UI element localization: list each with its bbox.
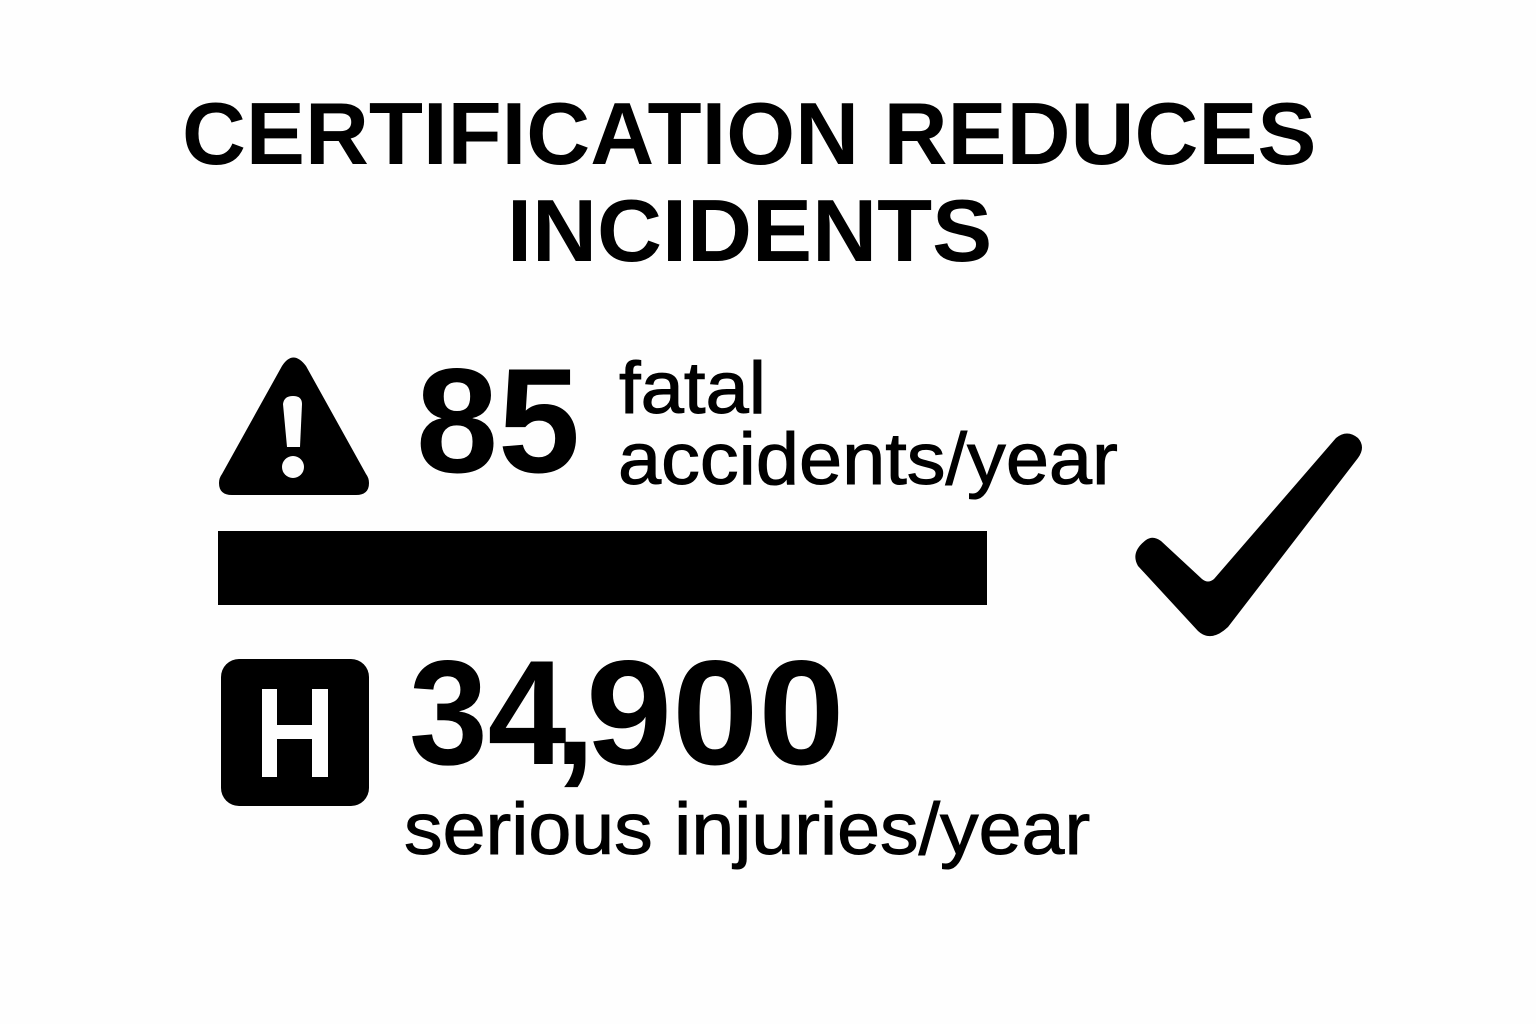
stat: 34,900: , (554, 629, 595, 796)
label: fatal accidents per year: fatal (619, 348, 766, 429)
title: INCIDENTS (507, 181, 992, 280)
title (182, 84, 1316, 280)
icon: hospital sign (221, 659, 369, 806)
icon: checkmark (1135, 434, 1362, 636)
icon: warning triangle (219, 358, 369, 495)
stat: 34,900: 34 (409, 629, 566, 796)
stat: 34,900 (409, 629, 845, 796)
stat: 34,900: 900 (586, 629, 845, 796)
label: fatal accidents per year (618, 348, 1118, 500)
stat: 85: 85 (416, 337, 580, 504)
label: fatal accidents per year: accidents/year (618, 419, 1118, 500)
title: CERTIFICATION REDUCES (182, 84, 1316, 183)
bar (218, 531, 987, 605)
label: serious injuries per year: serious injuries/year (404, 789, 1090, 870)
